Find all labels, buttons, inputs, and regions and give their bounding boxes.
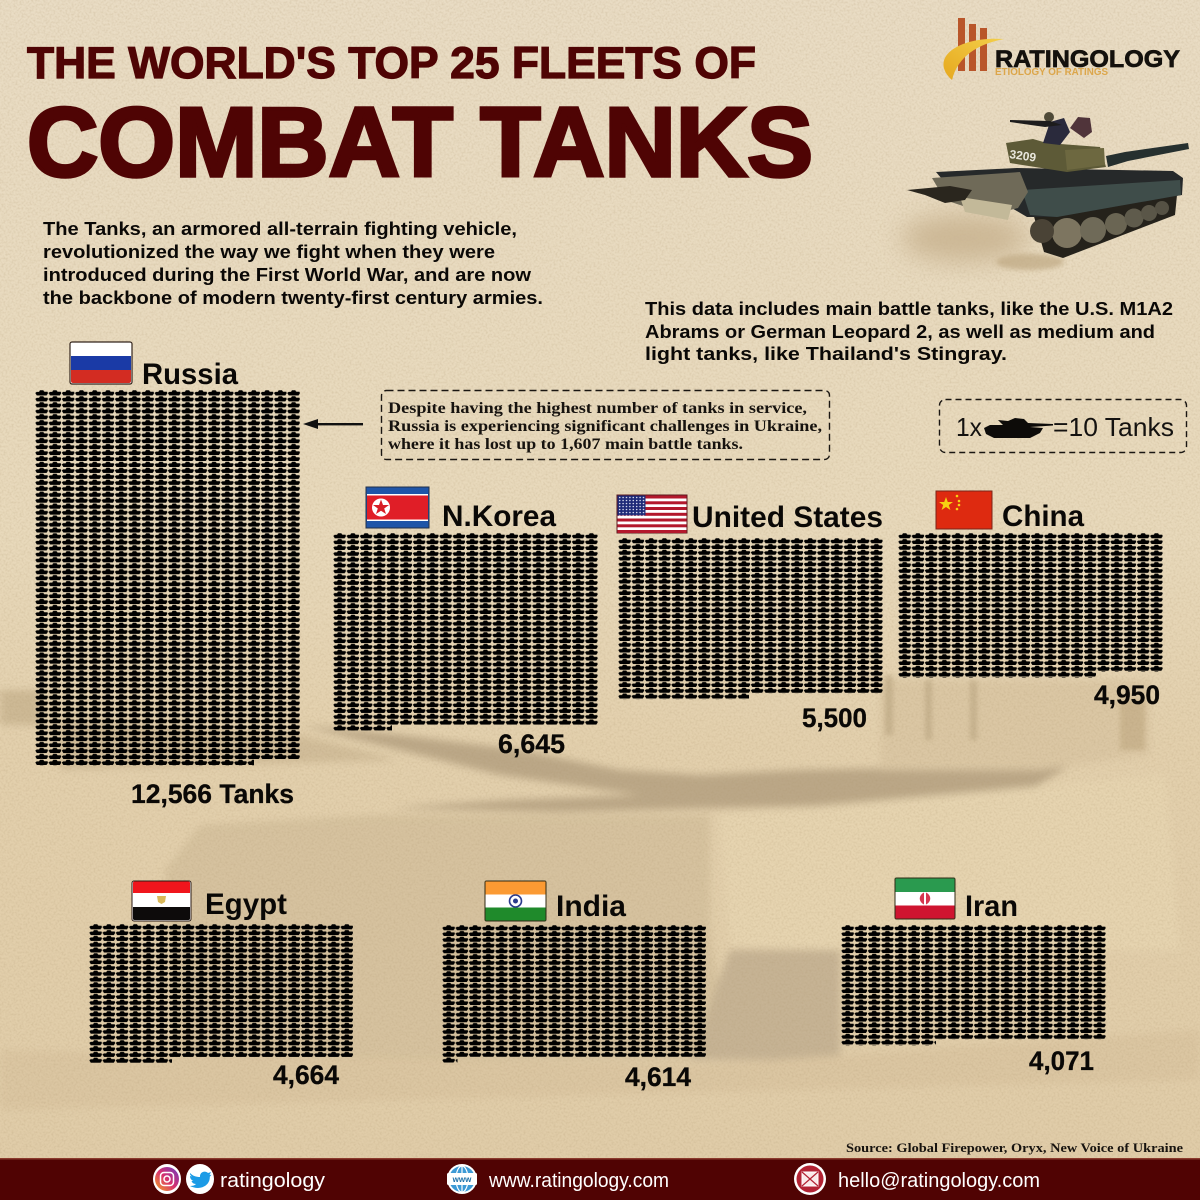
logo: Ratingology: RATINGOLOGY <box>995 46 1180 73</box>
illustration: battle tank with dust: 3209 <box>1009 147 1037 165</box>
icon: mail <box>794 1163 826 1195</box>
label: social handle: ratingology <box>220 1170 325 1192</box>
logo: Ratingology: ETIOLOGY OF RATINGS <box>995 67 1108 78</box>
tank grid: N.Korea <box>333 533 598 731</box>
icon: globe: www <box>452 1175 472 1184</box>
tank grid: Iran <box>841 925 1106 1046</box>
intro paragraph: introduced during the First World War, and are now <box>43 264 532 285</box>
label: email: hello@ratingology.com <box>838 1170 1040 1192</box>
label: Iran: Iran <box>965 890 1018 923</box>
icon: twitter <box>186 1164 214 1194</box>
value: China: 4,950 <box>1094 680 1160 710</box>
icon: globe <box>447 1164 477 1194</box>
label: N.Korea: N.Korea <box>442 500 556 533</box>
flag: Iran <box>895 878 955 919</box>
label: United States: United States <box>692 501 883 534</box>
legend: one icon equals 10 tanks: =10 Tanks <box>1053 412 1174 442</box>
label: website: www.ratingology.com <box>488 1170 669 1192</box>
tank grid: Russia <box>35 390 300 766</box>
data scope paragraph: This data includes main battle tanks, like the U.S. M1A2 <box>645 298 1173 319</box>
data scope paragraph <box>645 298 1173 364</box>
title line 2: COMBAT TANKS <box>27 87 813 197</box>
label: Russia: Russia <box>142 358 238 391</box>
flag: China <box>936 491 992 529</box>
value: Iran: 4,071 <box>1029 1046 1094 1076</box>
flag: Russia <box>70 342 132 384</box>
label: India: India <box>556 890 626 923</box>
callout: Russia losses <box>382 390 830 460</box>
intro paragraph: revolutionized the way we fight when they were <box>43 241 495 262</box>
callout: Russia losses: where it has lost up to 1,607 main battle tanks. <box>388 436 743 453</box>
label: Egypt: Egypt <box>205 888 287 921</box>
value: N.Korea: 6,645 <box>498 729 565 759</box>
icon: instagram <box>153 1164 181 1194</box>
data scope paragraph: Abrams or German Leopard 2, as well as medium and <box>645 321 1155 342</box>
value: Egypt: 4,664 <box>273 1060 339 1090</box>
arrow: callout to Russia grid <box>303 419 363 429</box>
footer bar <box>0 1158 1200 1200</box>
value: Russia: 12,566 Tanks <box>131 779 294 809</box>
flag: United States <box>617 495 687 533</box>
tank grid: China <box>898 533 1163 678</box>
illustration: battle tank with dust <box>901 112 1189 270</box>
source note: Source: Global Firepower, Oryx, New Voice of Ukraine <box>846 1141 1184 1155</box>
flag: India <box>485 881 546 921</box>
legend: one icon equals 10 tanks: 1x <box>956 412 982 442</box>
logo: Ratingology <box>944 18 1180 80</box>
callout: Russia losses: Russia is experiencing significant challenges in Ukraine, <box>388 418 822 435</box>
value: United States: 5,500 <box>802 703 867 733</box>
tank grid: India <box>442 925 706 1063</box>
label: China: China <box>1002 500 1084 533</box>
flag: North Korea <box>366 487 429 528</box>
data scope paragraph: light tanks, like Thailand's Stingray. <box>645 343 1007 364</box>
intro paragraph: The Tanks, an armored all-terrain fighting vehicle, <box>43 218 517 239</box>
intro paragraph: the backbone of modern twenty-first century armies. <box>43 287 543 308</box>
tank grid: Egypt <box>89 924 353 1063</box>
intro paragraph <box>43 218 543 308</box>
title line 1: THE WORLD'S TOP 25 FLEETS OF <box>27 39 756 88</box>
tank grid: United States <box>618 538 883 699</box>
flag: Egypt <box>132 881 191 921</box>
value: India: 4,614 <box>625 1062 691 1092</box>
legend: one icon equals 10 tanks <box>940 400 1186 452</box>
callout: Russia losses: Despite having the highest number of tanks in service, <box>388 400 807 417</box>
